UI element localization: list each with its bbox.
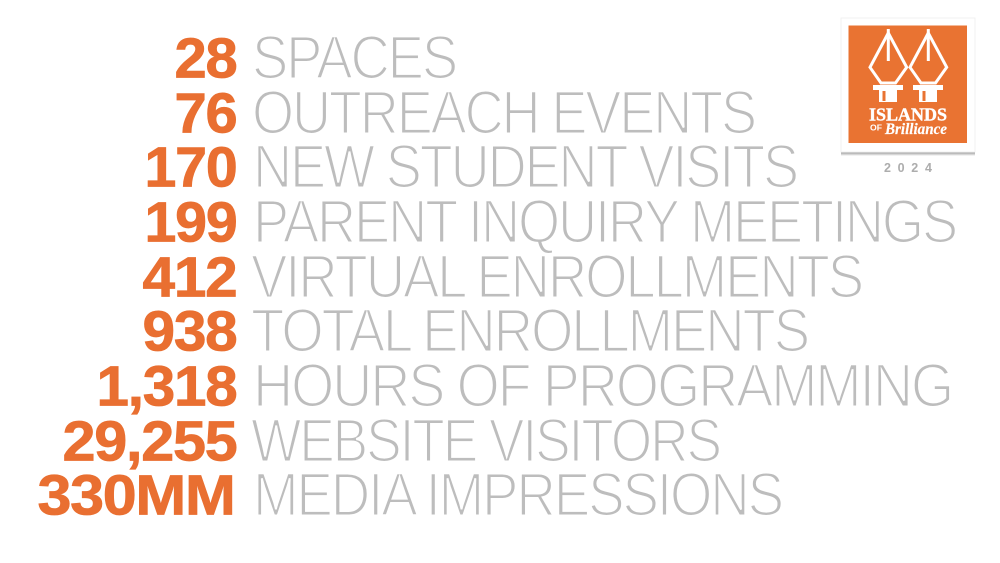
- stat: 170 new student visits: 170: [144, 136, 236, 200]
- year label: 2024: [884, 161, 939, 175]
- stat: 330MM media impressions: MEDIA IMPRESSIONS: [253, 460, 782, 528]
- stat: 330MM media impressions: 330MM: [38, 464, 235, 528]
- stat: 170 new student visits: NEW STUDENT VISITS: [253, 132, 797, 200]
- stat: 1,318 hours of programming: HOURS OF PROGRAMMING: [253, 352, 952, 420]
- stat: 29,255 website visitors: [62, 406, 720, 474]
- logo wordmark: of: OF: [870, 122, 882, 132]
- stat: 29,255 website visitors: 29,255: [62, 410, 237, 474]
- stat: 76 outreach events: 76: [174, 82, 236, 146]
- logo card: [841, 18, 975, 156]
- stat: 938 total enrollments: TOTAL ENROLLMENTS: [251, 296, 808, 364]
- stat: 29,255 website visitors: WEBSITE VISITORS: [251, 406, 720, 474]
- stat: 28 spaces: SPACES: [252, 24, 456, 92]
- logo orange background: [848, 26, 967, 143]
- stat: 28 spaces: [174, 24, 456, 92]
- icon: left pen nib: [870, 29, 907, 102]
- stat: 76 outreach events: OUTREACH EVENTS: [252, 78, 755, 146]
- stat: 412 virtual enrollments: 412: [142, 246, 236, 310]
- stat: 199 parent inquiry meetings: 199: [144, 190, 236, 254]
- stat: 412 virtual enrollments: VIRTUAL ENROLLMENTS: [251, 242, 862, 310]
- icon: right pen nib: [910, 29, 947, 102]
- stat: 1,318 hours of programming: 1,318: [96, 354, 236, 418]
- logo wordmark: Islands: ISLANDS: [869, 104, 947, 124]
- stat: 938 total enrollments: 938: [142, 300, 236, 364]
- stat: 330MM media impressions: [38, 460, 782, 528]
- stat: 28 spaces: 28: [174, 26, 236, 90]
- logo wordmark: Brilliance: Brilliance: [884, 121, 947, 138]
